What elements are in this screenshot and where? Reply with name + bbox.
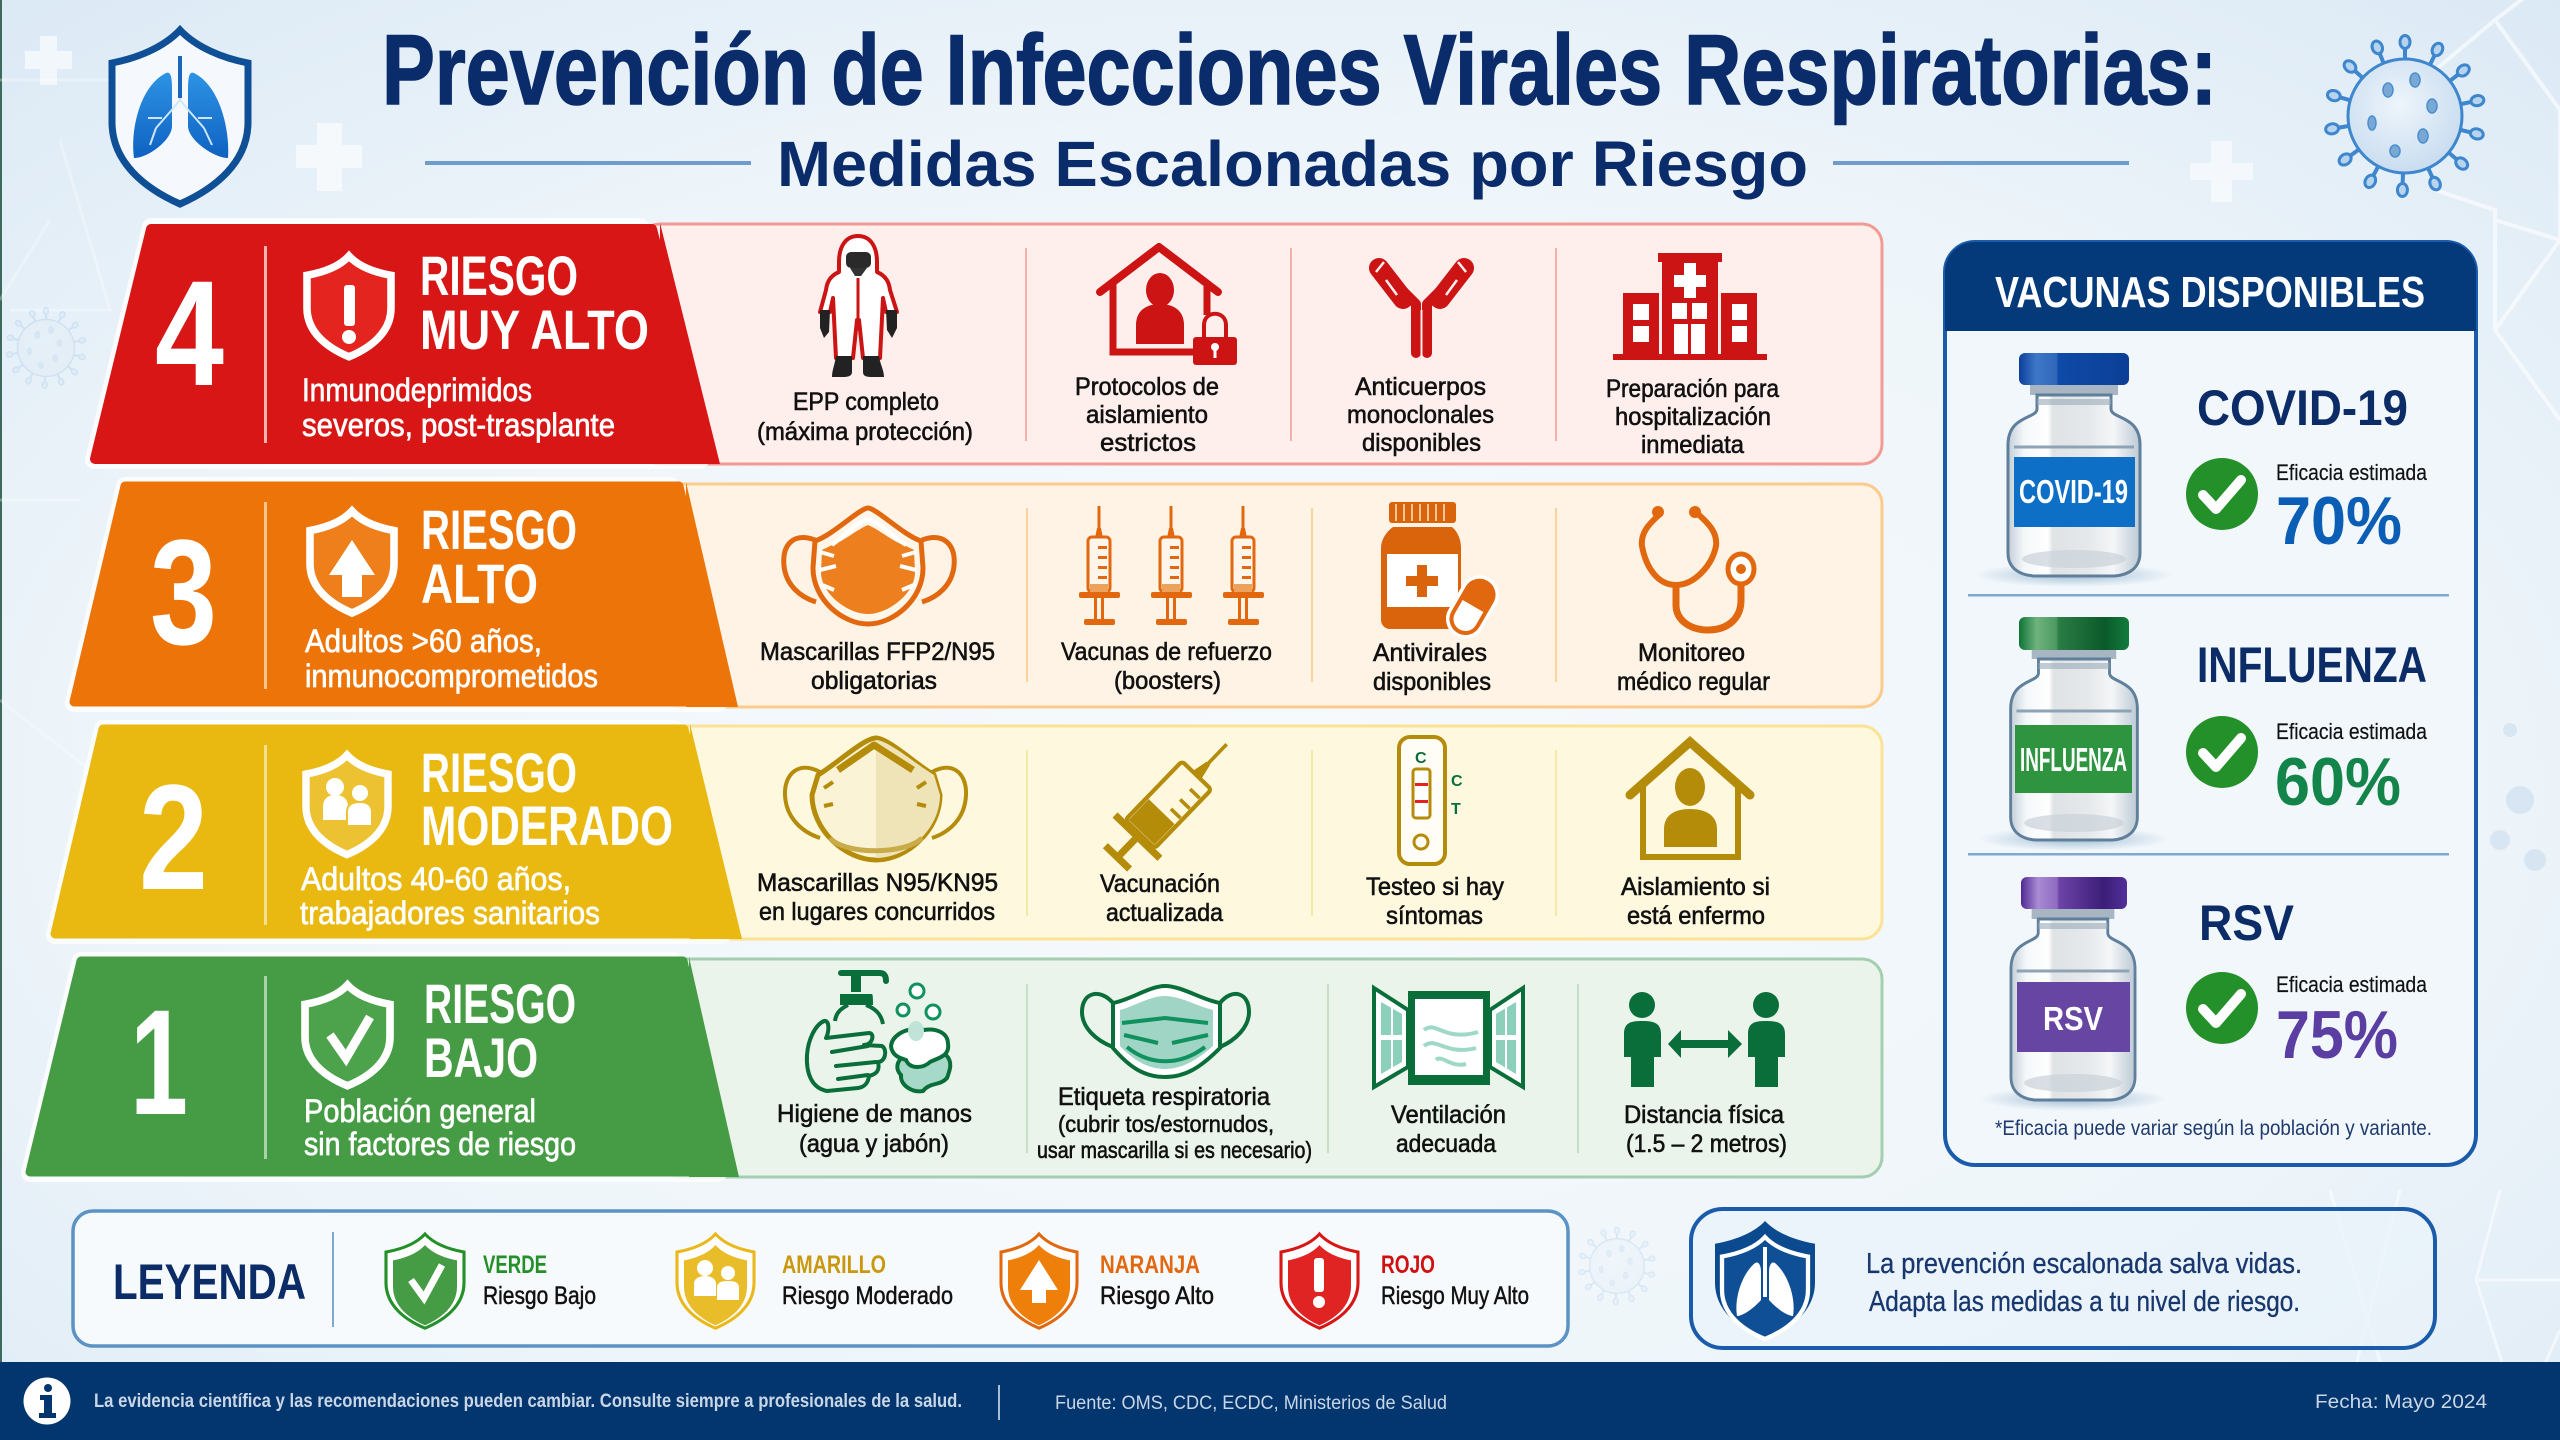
labels: Preparación para [1606,375,1779,403]
legend: naranja [1001,1234,1214,1328]
labels: usar mascarilla si es necesario) [1037,1137,1312,1163]
vaccine: influenza [2186,637,2428,820]
icon: shield check [305,985,390,1086]
vaccine: RSV: RSV [2199,895,2295,951]
legend: verde: VERDE [483,1251,547,1279]
number 3: 3 [150,508,217,676]
description: Población general [304,1093,536,1129]
icon: home isolation [1630,742,1750,857]
labels: en lugares concurridos [759,898,995,926]
panel: riesgo 3 [74,482,1882,707]
heading: MUY ALTO [420,298,649,361]
labels: (1.5 – 2 metros) [1626,1130,1787,1158]
labels: Etiqueta respiratoria [1058,1083,1270,1111]
vaccine: COVID-19: Eficacia estimada [2276,460,2428,485]
vial: influenza [1978,617,2170,851]
logo: shield with lungs [112,30,248,204]
legend: amarillo: Riesgo Moderado [782,1282,953,1310]
vial: COVID-19 [1974,353,2174,587]
panel heading: VACUNAS DISPONIBLES [1995,268,2425,317]
icon: info [24,1378,70,1424]
heading [420,244,649,361]
labels [777,1083,1787,1163]
labels: Mascarillas N95/KN95 [757,869,998,897]
message text: Adapta las medidas a tu nivel de riesgo. [1869,1286,2300,1318]
vaccine: influenza: Eficacia estimada [2276,719,2428,744]
icon: shield alert [307,256,391,357]
heading [424,972,576,1089]
heading: MODERADO [421,794,673,857]
number 4: 4 [155,249,224,417]
labels: inmediata [1641,431,1744,459]
disclaimer: La evidencia científica y las recomendaciones pueden cambiar. Consulte siempre a profesionales de la salud. [94,1391,962,1412]
icon: N95 mask [785,738,966,860]
vial: COVID-19: COVID-19 [2019,473,2128,510]
icon: shield people [306,755,388,855]
date: Fecha: Mayo 2024 [2315,1392,2487,1413]
vaccine: COVID-19: COVID-19 [2197,380,2408,436]
callout: mensaje [1691,1209,2435,1348]
legend: amarillo [677,1234,953,1328]
icon: shield arrow [310,511,394,613]
labels: Higiene de manos [777,1100,972,1128]
panel: leyenda [73,1211,1568,1346]
legend: naranja: NARANJA [1100,1251,1200,1279]
heading: RIESGO [420,244,578,307]
vaccine: RSV [2186,895,2428,1073]
icon: hospital [1613,253,1767,360]
labels: adecuada [1396,1130,1496,1158]
labels: Distancia física [1624,1101,1784,1129]
heading: BAJO [424,1026,538,1089]
icon: rapid test: C [1451,773,1463,790]
labels: actualizada [1106,899,1223,927]
description: trabajadores sanitarios [300,895,600,931]
message text [1866,1248,2302,1318]
description: Adultos >60 años, [305,623,542,659]
labels: estrictos [1100,429,1196,457]
panel: riesgo 1 [30,957,1882,1177]
vaccine: COVID-19 [2186,380,2428,559]
heading [421,741,673,857]
description: inmunocomprometidos [305,658,598,694]
labels: Aislamiento si [1621,873,1770,901]
icon: FFP2 mask [784,508,954,624]
description: severos, post-trasplante [302,407,615,443]
labels: disponibles [1373,668,1491,696]
icon: booster syringes [1079,506,1264,625]
icon: vaccine syringe [1093,723,1249,882]
heading: RIESGO [421,741,577,804]
subtitle: Medidas Escalonadas por Riesgo [777,128,1808,200]
vial: influenza: INFLUENZA [2020,741,2127,778]
icon: rapid test: C [1415,750,1427,767]
labels: (cubrir tos/estornudos, [1058,1111,1274,1137]
footnote: *Eficacia puede variar según la población y variante. [1995,1117,2432,1140]
labels: médico regular [1617,668,1770,696]
vaccine: RSV: Eficacia estimada [2276,972,2428,997]
icon: antibody [1376,262,1466,358]
icon: rapid test [1399,737,1463,864]
icon: surgical mask [1082,986,1249,1077]
icon: rapid test: T [1451,801,1461,818]
labels: aislamiento [1086,401,1208,429]
description [300,861,600,931]
description: sin factores de riesgo [304,1126,576,1162]
labels [757,869,1770,930]
labels: Mascarillas FFP2/N95 [760,638,995,666]
vaccine: influenza: 60% [2275,744,2401,820]
labels: Antivirales [1373,639,1487,667]
icon: isolation house [1100,247,1237,365]
legend: amarillo: AMARILLO [782,1251,886,1279]
number 1: 1 [130,978,188,1146]
labels: síntomas [1386,902,1483,930]
number 2: 2 [139,753,208,921]
description [304,1093,576,1162]
panel: riesgo 4 [94,223,1882,464]
description: Inmunodeprimidos [302,372,532,408]
description: Adultos 40-60 años, [301,861,571,897]
source: Fuente: OMS, CDC, ECDC, Ministerios de Salud [1055,1393,1447,1414]
heading: RIESGO [424,972,576,1035]
labels: (agua y jabón) [799,1130,949,1158]
labels [760,638,1770,696]
labels: Ventilación [1391,1101,1506,1129]
labels: está enfermo [1627,902,1765,930]
legend title: LEYENDA [113,1254,306,1310]
panel: vacunas disponibles [1945,242,2476,1165]
icon: stethoscope [1642,506,1754,630]
icon: antiviral bottle [1381,502,1503,642]
icon: shield lungs [1715,1221,1815,1340]
labels: Vacunación [1100,870,1220,898]
description [305,623,598,694]
message text: La prevención escalonada salva vidas. [1866,1248,2302,1280]
labels: Testeo si hay [1366,873,1504,901]
vial: RSV: RSV [2043,1000,2103,1037]
labels: hospitalización [1615,403,1771,431]
icon: protective suit [820,236,897,377]
labels: disponibles [1362,429,1481,457]
labels: Anticuerpos [1355,373,1486,401]
icon: physical distance [1624,992,1785,1087]
heading: ALTO [421,552,538,615]
labels: (boosters) [1114,667,1221,695]
legend: rojo [1281,1234,1529,1328]
labels: monoclonales [1347,401,1494,429]
labels: Protocolos de [1075,373,1219,401]
description [302,372,615,443]
icon: soap and hands [807,972,950,1091]
footer bar [0,1362,2560,1440]
heading: RIESGO [421,498,577,561]
labels: Vacunas de refuerzo [1061,638,1272,666]
labels: (máxima protección) [757,418,973,446]
labels: Monitoreo [1638,639,1745,667]
labels: obligatorias [811,667,937,695]
legend: naranja: Riesgo Alto [1100,1282,1214,1310]
legend: rojo: ROJO [1381,1251,1435,1279]
vaccine: RSV: 75% [2276,997,2398,1073]
labels: EPP completo [793,388,939,416]
icon: virus [2325,36,2485,197]
legend: rojo: Riesgo Muy Alto [1381,1282,1529,1310]
legend: verde: Riesgo Bajo [483,1282,596,1310]
heading [421,498,577,615]
panel: riesgo 2 [55,723,1882,939]
vaccine: COVID-19: 70% [2276,483,2402,559]
subtitle [425,128,2129,200]
icon: open window [1374,988,1523,1087]
vaccine: influenza: INFLUENZA [2197,637,2427,693]
labels [757,373,1779,459]
legend: verde [386,1234,596,1328]
vial: RSV [1979,877,2167,1111]
